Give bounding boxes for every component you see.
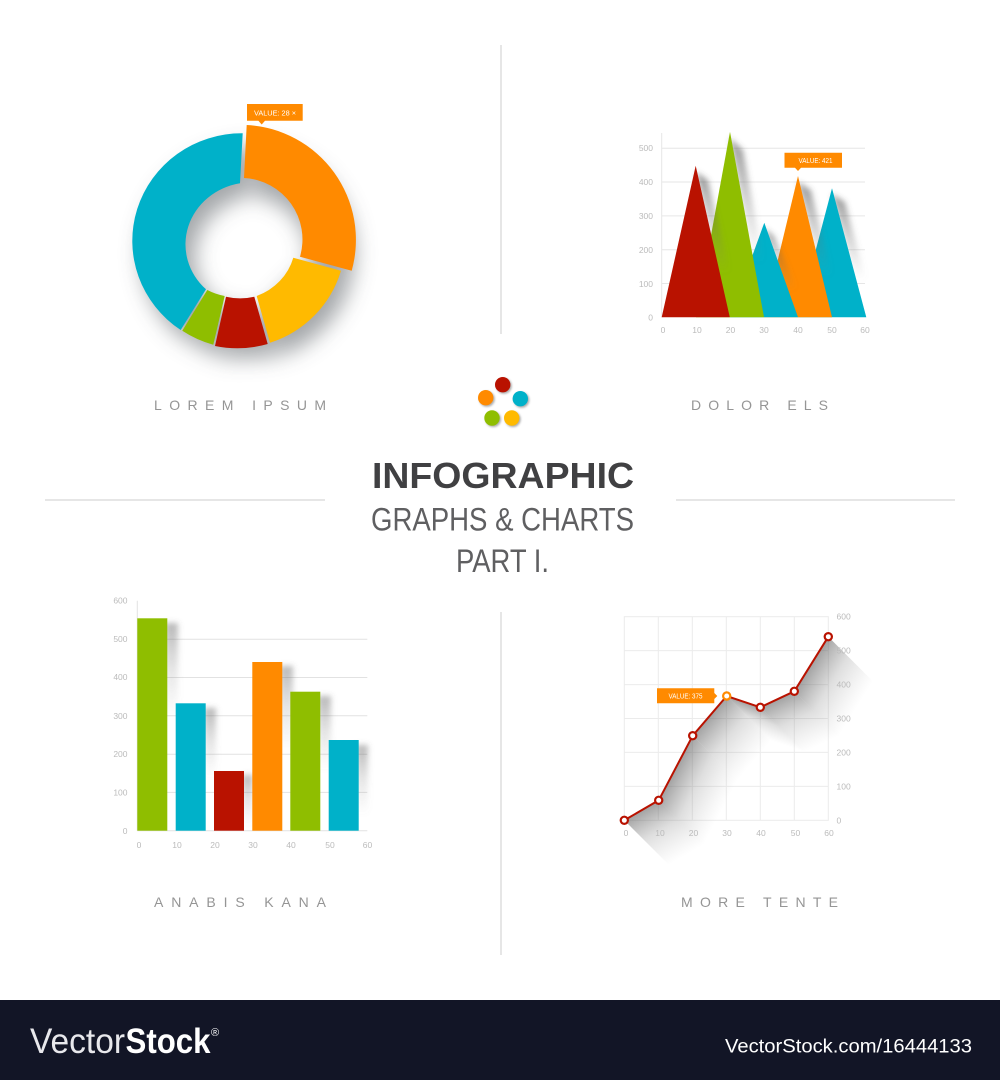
bar axis labels: 200 [113,749,128,759]
panel: triangle chart [639,132,876,335]
triangle axis labels: 200 [639,245,653,255]
bar 50 teal [329,740,359,831]
bar 30 orange [252,662,282,831]
panel: line chart [621,612,884,876]
bar axis labels: 40 [286,840,296,850]
triangle tooltip [784,153,842,171]
bar axis labels [113,596,372,850]
triangle tooltip: VALUE: 421 [798,158,833,165]
line chart axis labels: 60 [824,828,834,838]
bar axis labels: 0 [123,826,128,836]
bar 20 red [214,771,244,831]
line chart axis labels: 20 [689,828,698,838]
footer url: VectorStock.com/16444133 [725,1036,972,1058]
orange triangle 40 [764,176,842,317]
bar axis labels: 20 [210,840,220,850]
subtitle line 2: PART I. [456,543,549,579]
triangle axis labels: 100 [639,279,653,289]
line chart axis labels: 300 [836,714,851,724]
triangle axis labels: 20 [726,325,735,335]
bar 10 teal [176,703,206,831]
footer bar [0,1000,1000,1080]
bar axis labels: 60 [363,840,372,850]
line chart axis labels: 50 [791,828,800,838]
line chart tooltip: VALUE: 375 [668,694,703,700]
donut segment: orange, exploded [244,125,356,271]
data point markers [621,633,832,824]
donut segment: red [215,297,268,348]
bar axis labels: 10 [172,840,182,850]
line chart caption: MORE TENTE [681,894,838,910]
donut segment: yellow [257,258,341,343]
line chart axis labels: 500 [836,646,851,656]
line chart axis labels: 10 [655,828,665,838]
line chart axis labels [624,612,851,838]
footer logo: Vector [30,1022,125,1061]
bar axis labels: 50 [325,840,335,850]
registered mark: ® [211,1027,219,1039]
panel: donut chart [132,104,356,359]
bar shadows [165,623,368,825]
bar chart caption: ANABIS KANA [154,894,327,910]
subtitle line 1: GRAPHS & CHARTS [371,502,634,538]
line chart axis labels: 200 [836,748,851,758]
line chart axis labels: 30 [722,828,732,838]
triangle axis labels: 50 [827,325,837,335]
panel: bar chart [113,596,372,850]
triangle axis labels: 500 [639,143,653,153]
donut shadow [141,146,355,359]
triangle axis labels: 0 [648,312,653,322]
bar 40 green [290,692,320,831]
triangle axis labels: 0 [661,325,666,335]
footer logo bold part: Stock [126,1022,211,1061]
line chart tooltip [657,688,717,703]
triangle axis labels: 300 [639,211,653,221]
bar axis labels: 100 [113,788,128,798]
line chart axis labels: 100 [836,782,851,792]
triangle axis labels: 40 [793,325,803,335]
donut caption: LOREM IPSUM [154,397,326,413]
triangle chart caption: DOLOR ELS [691,397,828,413]
red triangle 10 [662,166,740,317]
title: INFOGRAPHIC [372,455,634,496]
line chart long shadow [624,637,884,876]
donut tooltip [247,104,303,124]
triangle axis labels [639,143,870,335]
line chart axis labels: 0 [624,828,629,838]
bar axis labels: 400 [113,672,128,682]
triangle axis labels: 60 [860,325,870,335]
bar axis labels: 500 [113,634,128,644]
data line [624,637,828,820]
line chart axis labels: 400 [836,680,851,690]
teal triangle 50 [798,188,876,317]
bar axis labels: 300 [113,711,128,721]
bar axis labels: 0 [137,840,142,850]
icon: five coloured dots [478,377,529,427]
donut segment: green [182,290,225,345]
triangle axis labels: 400 [639,177,653,187]
triangle axis labels: 10 [692,325,702,335]
green triangle 20 [696,132,774,317]
line chart axis labels: 600 [836,612,851,622]
triangle axis labels: 30 [759,325,769,335]
bar axis labels: 600 [113,596,128,606]
bar axis labels: 30 [248,840,258,850]
donut tooltip: VALUE: 28 × [254,110,296,118]
line chart axis labels: 40 [756,828,766,838]
bar 0 green [137,618,167,831]
line chart axis labels: 0 [836,816,842,826]
teal triangle 30 [730,223,808,317]
donut segment: teal [132,133,243,330]
